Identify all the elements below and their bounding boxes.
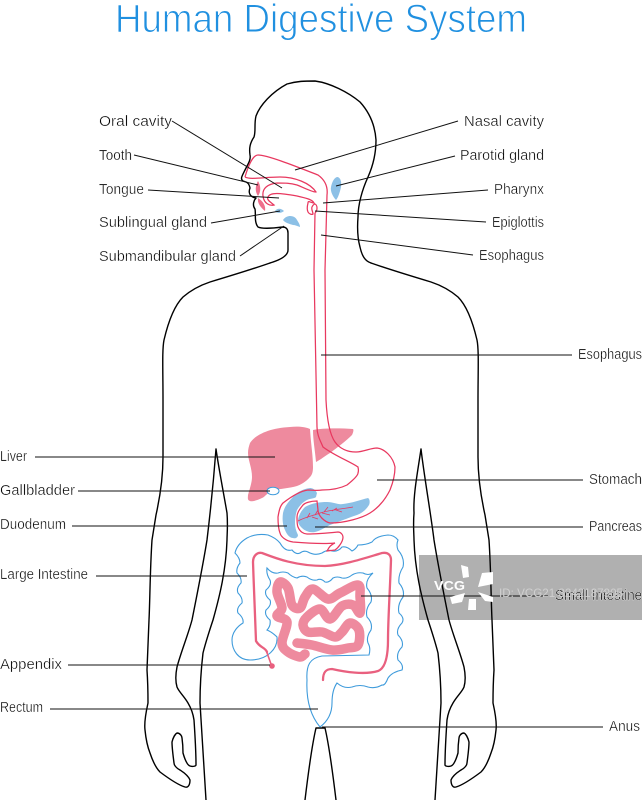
label: Tooth: Tooth [99,147,132,164]
human body outline [145,81,496,800]
watermark band [419,555,642,620]
watermark logo: ID: VCG21 3242187905 [499,586,623,600]
label: Parotid gland: Parotid gland [460,147,544,164]
label: Nasal cavity [295,113,544,170]
liver [248,427,353,501]
pancreas [298,498,370,532]
label: Sublingual gland [99,211,280,231]
label: Liver: Liver [0,448,27,465]
label: Esophagus upper [321,235,544,264]
label: Parotid gland [336,147,544,186]
label: Oral cavity: Oral cavity [99,113,173,130]
small intestine [277,582,361,657]
label: Tongue [99,181,279,198]
tooth [256,181,265,211]
label: Oral cavity [99,113,282,188]
label: Pharynx [323,181,544,203]
label: Gallbladder: Gallbladder [0,482,75,499]
large intestine outer wall [232,534,404,727]
legs crotch [305,728,336,800]
submandibular gland [283,216,300,227]
watermark logo: VCG [434,578,465,593]
label: Nasal cavity: Nasal cavity [464,113,544,130]
label: Epiglottis [315,211,544,231]
label: Large Intestine: Large Intestine [0,566,88,583]
label: Rectum: Rectum [0,699,43,716]
sublingual gland [275,209,284,213]
label: Epiglottis: Epiglottis [492,214,544,231]
label: Pharynx: Pharynx [494,181,544,198]
label: Tooth [99,147,258,185]
watermark logo [434,565,623,610]
label: Duodenum: Duodenum [0,516,66,533]
label: Appendix: Appendix [0,656,62,673]
label: Esophagus upper: Esophagus [479,247,544,264]
digestive tract: nasal cavity, mouth, pharynx, esophagus, stomach, duodenum [245,155,395,551]
gallbladder [267,487,279,495]
label: Tongue: Tongue [99,181,144,198]
parotid gland [331,177,341,200]
label: Submandibular gland: Submandibular gland [99,248,236,265]
label: Sublingual gland: Sublingual gland [99,214,207,231]
duodenum blue [283,488,317,538]
label: Submandibular gland [99,226,284,265]
large intestine inner pink wall and appendix [253,553,391,680]
